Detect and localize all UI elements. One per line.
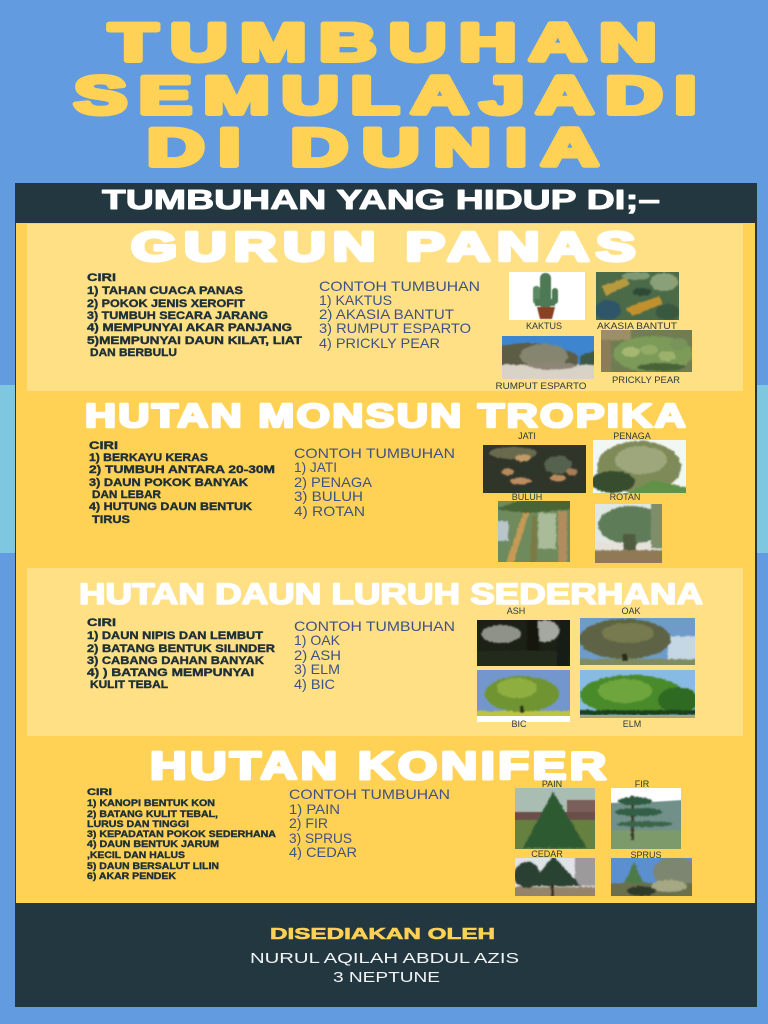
text: contoh tumbuhan gurun panas: 3) RUMPUT ESPARTO bbox=[319, 321, 471, 336]
photo: sprus bbox=[611, 858, 692, 896]
text: ciri gurun panas bbox=[87, 272, 302, 359]
text: contoh tumbuhan gurun panas bbox=[319, 279, 480, 351]
text: class: 3 NEPTUNE bbox=[333, 969, 440, 986]
text: ciri hutan daun luruh: 3) CABANG DAHAN BANYAK bbox=[87, 655, 264, 667]
labels: hutan monsun photos: JATI bbox=[518, 431, 536, 441]
text: disediakan oleh: DISEDIAKAN OLEH bbox=[270, 926, 495, 943]
text: ciri hutan daun luruh: 4) ) BATANG MEMPUNYAI bbox=[87, 667, 254, 679]
labels: gurun panas photos: AKASIA BANTUT bbox=[597, 321, 678, 331]
text: ciri gurun panas: 1) TAHAN CUACA PANAS bbox=[87, 285, 243, 297]
photo: elm bbox=[580, 670, 695, 718]
photo: buluh bbox=[498, 501, 570, 562]
text: ciri hutan konifer: 1) KANOPI BENTUK KON bbox=[87, 798, 215, 809]
footer: credits bbox=[250, 926, 519, 986]
heading: hutan monsun tropika: HUTAN MONSUN TROPIKA bbox=[85, 398, 686, 435]
text: ciri hutan daun luruh: 2) BATANG BENTUK SILINDER bbox=[87, 643, 275, 655]
panel: main dark background bbox=[15, 183, 757, 1007]
photo: bic bbox=[477, 670, 570, 722]
panel: hutan daun luruh sederhana bbox=[27, 568, 743, 736]
text: ciri hutan konifer: ,KECIL DAN HALUS bbox=[87, 850, 186, 861]
text: ciri hutan daun luruh: 1) DAUN NIPIS DAN LEMBUT bbox=[87, 630, 263, 642]
text: ciri hutan konifer: LURUS DAN TINGGI bbox=[87, 819, 189, 830]
labels: gurun panas photos: KAKTUS bbox=[526, 321, 562, 331]
labels: hutan monsun photos: BULUH bbox=[512, 492, 542, 502]
text: ciri gurun panas: 3) TUMBUH SECARA JARANG bbox=[87, 310, 268, 322]
text: ciri gurun panas: 2) POKOK JENIS XEROFIT bbox=[87, 298, 245, 310]
photo: rumput esparto bbox=[502, 336, 594, 379]
text: contoh tumbuhan hutan daun luruh: 1) OAK bbox=[294, 633, 340, 648]
photo: akasia bantut bbox=[596, 272, 679, 320]
text: contoh tumbuhan gurun panas: 4) PRICKLY PEAR bbox=[319, 336, 440, 351]
title bbox=[74, 13, 696, 177]
text: contoh tumbuhan gurun panas: 1) KAKTUS bbox=[319, 293, 392, 308]
text: ciri hutan konifer: 5) DAUN BERSALUT LILIN bbox=[87, 861, 219, 872]
text: ciri hutan monsun tropika: 1) BERKAYU KERAS bbox=[89, 452, 208, 464]
text: contoh tumbuhan gurun panas: 2) AKASIA BANTUT bbox=[319, 307, 454, 322]
labels: hutan daun luruh photos: OAK bbox=[621, 606, 641, 616]
text: ciri hutan monsun tropika: DAN LEBAR bbox=[92, 489, 161, 501]
text: ciri hutan daun luruh bbox=[87, 617, 275, 691]
photo: oak bbox=[580, 618, 695, 665]
heading: hutan daun luruh sederhana: HUTAN DAUN LURUH SEDERHANA bbox=[79, 578, 703, 611]
panel: yellow background bbox=[16, 223, 755, 903]
text: ciri hutan konifer: 3) KEPADATAN POKOK SEDERHANA bbox=[87, 829, 276, 840]
text: contoh tumbuhan hutan konifer: 3) SPRUS bbox=[289, 831, 352, 846]
panel: gurun panas bbox=[27, 224, 743, 391]
text: ciri hutan monsun tropika: 4) HUTUNG DAUN BENTUK bbox=[89, 501, 252, 513]
labels: gurun panas photos: PRICKLY PEAR bbox=[612, 375, 681, 385]
text: ciri hutan daun luruh: KULIT TEBAL bbox=[90, 679, 168, 691]
labels: hutan konifer photos: PAIN bbox=[542, 779, 562, 789]
text: ciri hutan monsun tropika: TIRUS bbox=[92, 514, 130, 526]
text: contoh tumbuhan hutan daun luruh: 2) ASH bbox=[294, 648, 341, 663]
text: ciri gurun panas: 5)MEMPUNYAI DAUN KILAT, LIAT bbox=[87, 335, 302, 347]
text: author name: NURUL AQILAH ABDUL AZIS bbox=[250, 950, 519, 967]
text: contoh tumbuhan hutan konifer: 2) FIR bbox=[289, 816, 328, 831]
panel: hutan monsun tropika bbox=[85, 398, 689, 566]
photo: prickly pear bbox=[601, 330, 692, 372]
heading: gurun panas: GURUN PANAS bbox=[131, 224, 636, 269]
labels: hutan konifer photos: SPRUS bbox=[630, 850, 662, 860]
labels: hutan monsun photos: ROTAN bbox=[610, 492, 640, 502]
photo: pain bbox=[515, 788, 595, 849]
text: ciri hutan monsun tropika: CIRI bbox=[89, 440, 118, 452]
photo: fir bbox=[611, 788, 681, 849]
title: DI DUNIA bbox=[147, 118, 598, 177]
text: contoh tumbuhan hutan daun luruh: CONTOH TUMBUHAN bbox=[294, 619, 455, 634]
labels: hutan daun luruh photos bbox=[507, 606, 641, 729]
panel: hutan konifer bbox=[87, 744, 697, 899]
text: contoh tumbuhan hutan monsun bbox=[294, 446, 455, 519]
labels: hutan daun luruh photos: BIC bbox=[511, 719, 527, 729]
text: contoh tumbuhan hutan daun luruh: 3) ELM bbox=[294, 662, 340, 677]
labels: hutan konifer photos bbox=[531, 779, 662, 860]
photo: cedar bbox=[515, 858, 595, 896]
labels: hutan daun luruh photos: ELM bbox=[623, 719, 641, 729]
text: ciri gurun panas: 4) MEMPUNYAI AKAR PANJANG bbox=[87, 322, 292, 334]
text: contoh tumbuhan hutan konifer bbox=[289, 787, 450, 860]
title: SEMULAJADI bbox=[74, 66, 696, 125]
text: contoh tumbuhan hutan monsun: 4) ROTAN bbox=[294, 504, 365, 519]
heading: tumbuhan yang hidup di: TUMBUHAN YANG HIDUP DI;– bbox=[102, 184, 660, 215]
text: contoh tumbuhan hutan daun luruh bbox=[294, 619, 455, 692]
text: contoh tumbuhan gurun panas: CONTOH TUMBUHAN bbox=[319, 279, 480, 294]
text: contoh tumbuhan hutan daun luruh: 4) BIC bbox=[294, 677, 335, 692]
text: ciri hutan monsun tropika bbox=[89, 440, 275, 526]
text: ciri hutan konifer: 6) AKAR PENDEK bbox=[87, 871, 176, 882]
text: contoh tumbuhan hutan monsun: 1) JATI bbox=[294, 460, 337, 475]
text: ciri hutan konifer: 4) DAUN BENTUK JARUM bbox=[87, 839, 219, 850]
photo: rotan bbox=[595, 504, 662, 563]
labels: hutan daun luruh photos: ASH bbox=[507, 606, 525, 616]
photo: jati bbox=[483, 445, 586, 493]
text: ciri gurun panas: CIRI bbox=[87, 272, 116, 284]
text: ciri hutan konifer bbox=[87, 787, 276, 882]
text: ciri hutan monsun tropika: 3) DAUN POKOK BANYAK bbox=[89, 477, 248, 489]
photo: kaktus bbox=[509, 272, 585, 320]
title: TUMBUHAN bbox=[109, 13, 656, 72]
text: ciri hutan daun luruh: CIRI bbox=[87, 617, 116, 629]
photo: ash bbox=[477, 620, 570, 666]
labels: hutan monsun photos: PENAGA bbox=[613, 431, 651, 441]
text: ciri hutan konifer: 2) BATANG KULIT TEBAL, bbox=[87, 809, 218, 820]
text: contoh tumbuhan hutan konifer: CONTOH TUMBUHAN bbox=[289, 787, 450, 802]
photo: penaga bbox=[593, 440, 686, 493]
text: contoh tumbuhan hutan monsun: 2) PENAGA bbox=[294, 475, 373, 490]
text: ciri hutan konifer: CIRI bbox=[87, 787, 112, 798]
heading: hutan konifer: HUTAN KONIFER bbox=[150, 744, 606, 788]
labels: hutan konifer photos: FIR bbox=[635, 779, 650, 789]
text: ciri hutan monsun tropika: 2) TUMBUH ANTARA 20-30M bbox=[89, 464, 275, 476]
labels: gurun panas photos bbox=[496, 321, 681, 391]
text: contoh tumbuhan hutan monsun: CONTOH TUMBUHAN bbox=[294, 446, 455, 461]
text: contoh tumbuhan hutan konifer: 1) PAIN bbox=[289, 802, 340, 817]
text: contoh tumbuhan hutan konifer: 4) CEDAR bbox=[289, 845, 357, 860]
text: contoh tumbuhan hutan monsun: 3) BULUH bbox=[294, 489, 363, 504]
labels: hutan konifer photos: CEDAR bbox=[531, 849, 563, 859]
labels: gurun panas photos: RUMPUT ESPARTO bbox=[496, 381, 586, 391]
text: ciri gurun panas: DAN BERBULU bbox=[90, 347, 177, 359]
labels: hutan monsun photos bbox=[512, 431, 651, 502]
